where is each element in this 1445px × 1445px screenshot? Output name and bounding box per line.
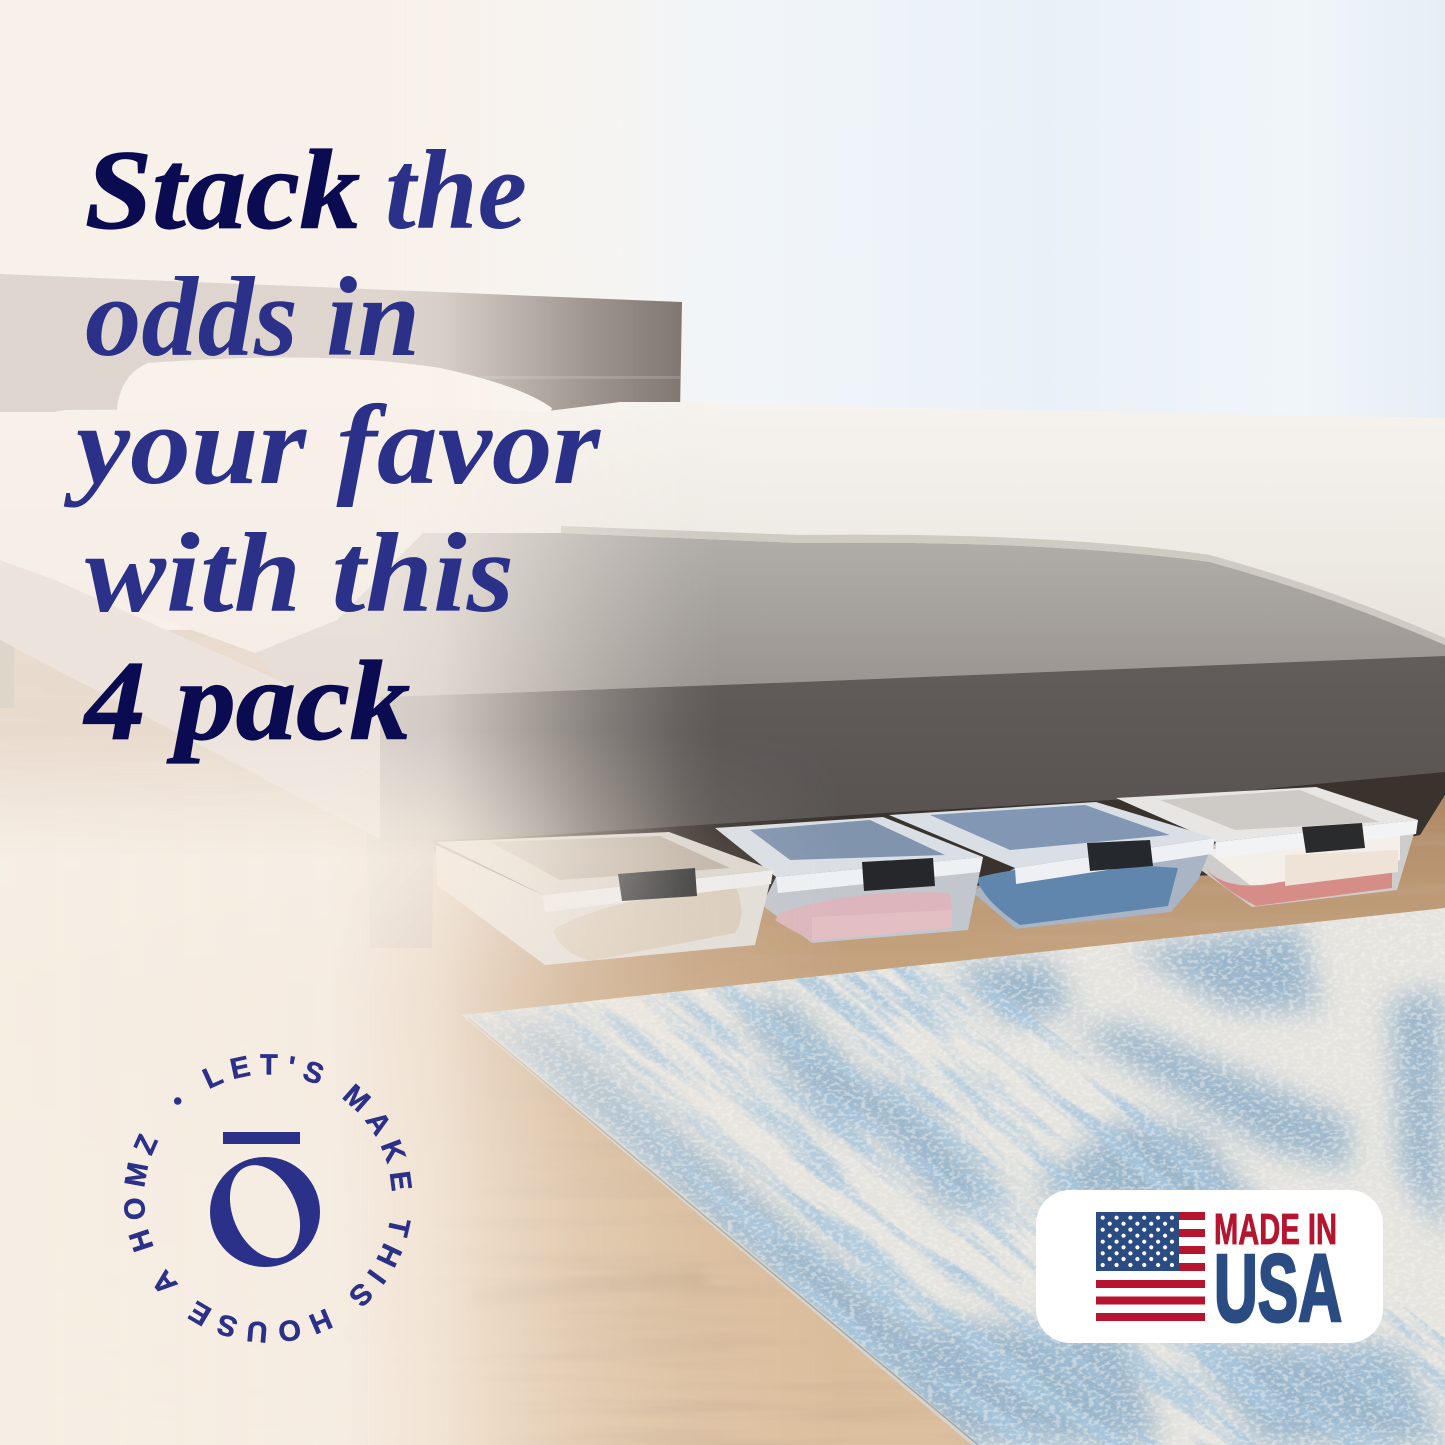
wall and curtains: [0, 0, 1445, 460]
left fade overlay: [0, 0, 778, 1445]
white pill: [1036, 1190, 1383, 1343]
usa text: USA: [1214, 1235, 1342, 1342]
storage boxes: four clear bins with latches: [436, 787, 1418, 965]
bed legs: [366, 800, 434, 948]
mattress: [255, 525, 1445, 700]
under-bed shadow: [430, 765, 1445, 910]
line 1: Stack: [85, 128, 360, 253]
line 3: your favor: [63, 383, 601, 508]
bed base: [380, 655, 1445, 842]
line 5: 4 pack: [83, 639, 410, 764]
headboard: [0, 274, 682, 412]
rug diagonal weave: [470, 966, 1445, 1445]
logo o: [210, 1154, 320, 1269]
box 2: [715, 817, 983, 943]
box 4: [1116, 787, 1418, 907]
made in text: MADE IN: [1214, 1205, 1337, 1254]
separator dot: [174, 1097, 182, 1105]
circular slogan: LET'S MAKE THIS HOUSE A HOMZ: [124, 1054, 412, 1343]
wood floor: [0, 630, 1445, 1445]
box 1: [436, 832, 773, 965]
headline: [63, 128, 601, 764]
white duvet: [0, 402, 1445, 653]
box 3: [889, 802, 1215, 929]
line 2: odds in: [85, 255, 420, 380]
icon: american flag: [1096, 1212, 1205, 1321]
line 1: the: [385, 128, 527, 253]
line 1: [85, 128, 527, 253]
rug speckle: [440, 900, 1445, 1445]
rug: [440, 900, 1445, 1445]
bed frame left side: [0, 555, 385, 842]
line 4: with this: [85, 511, 514, 636]
pillows: [110, 358, 552, 440]
logo bar: [223, 1132, 300, 1144]
brand badge: [124, 1054, 412, 1343]
rug blue streaks: [480, 925, 1445, 1445]
made in USA badge: [1036, 1190, 1383, 1343]
